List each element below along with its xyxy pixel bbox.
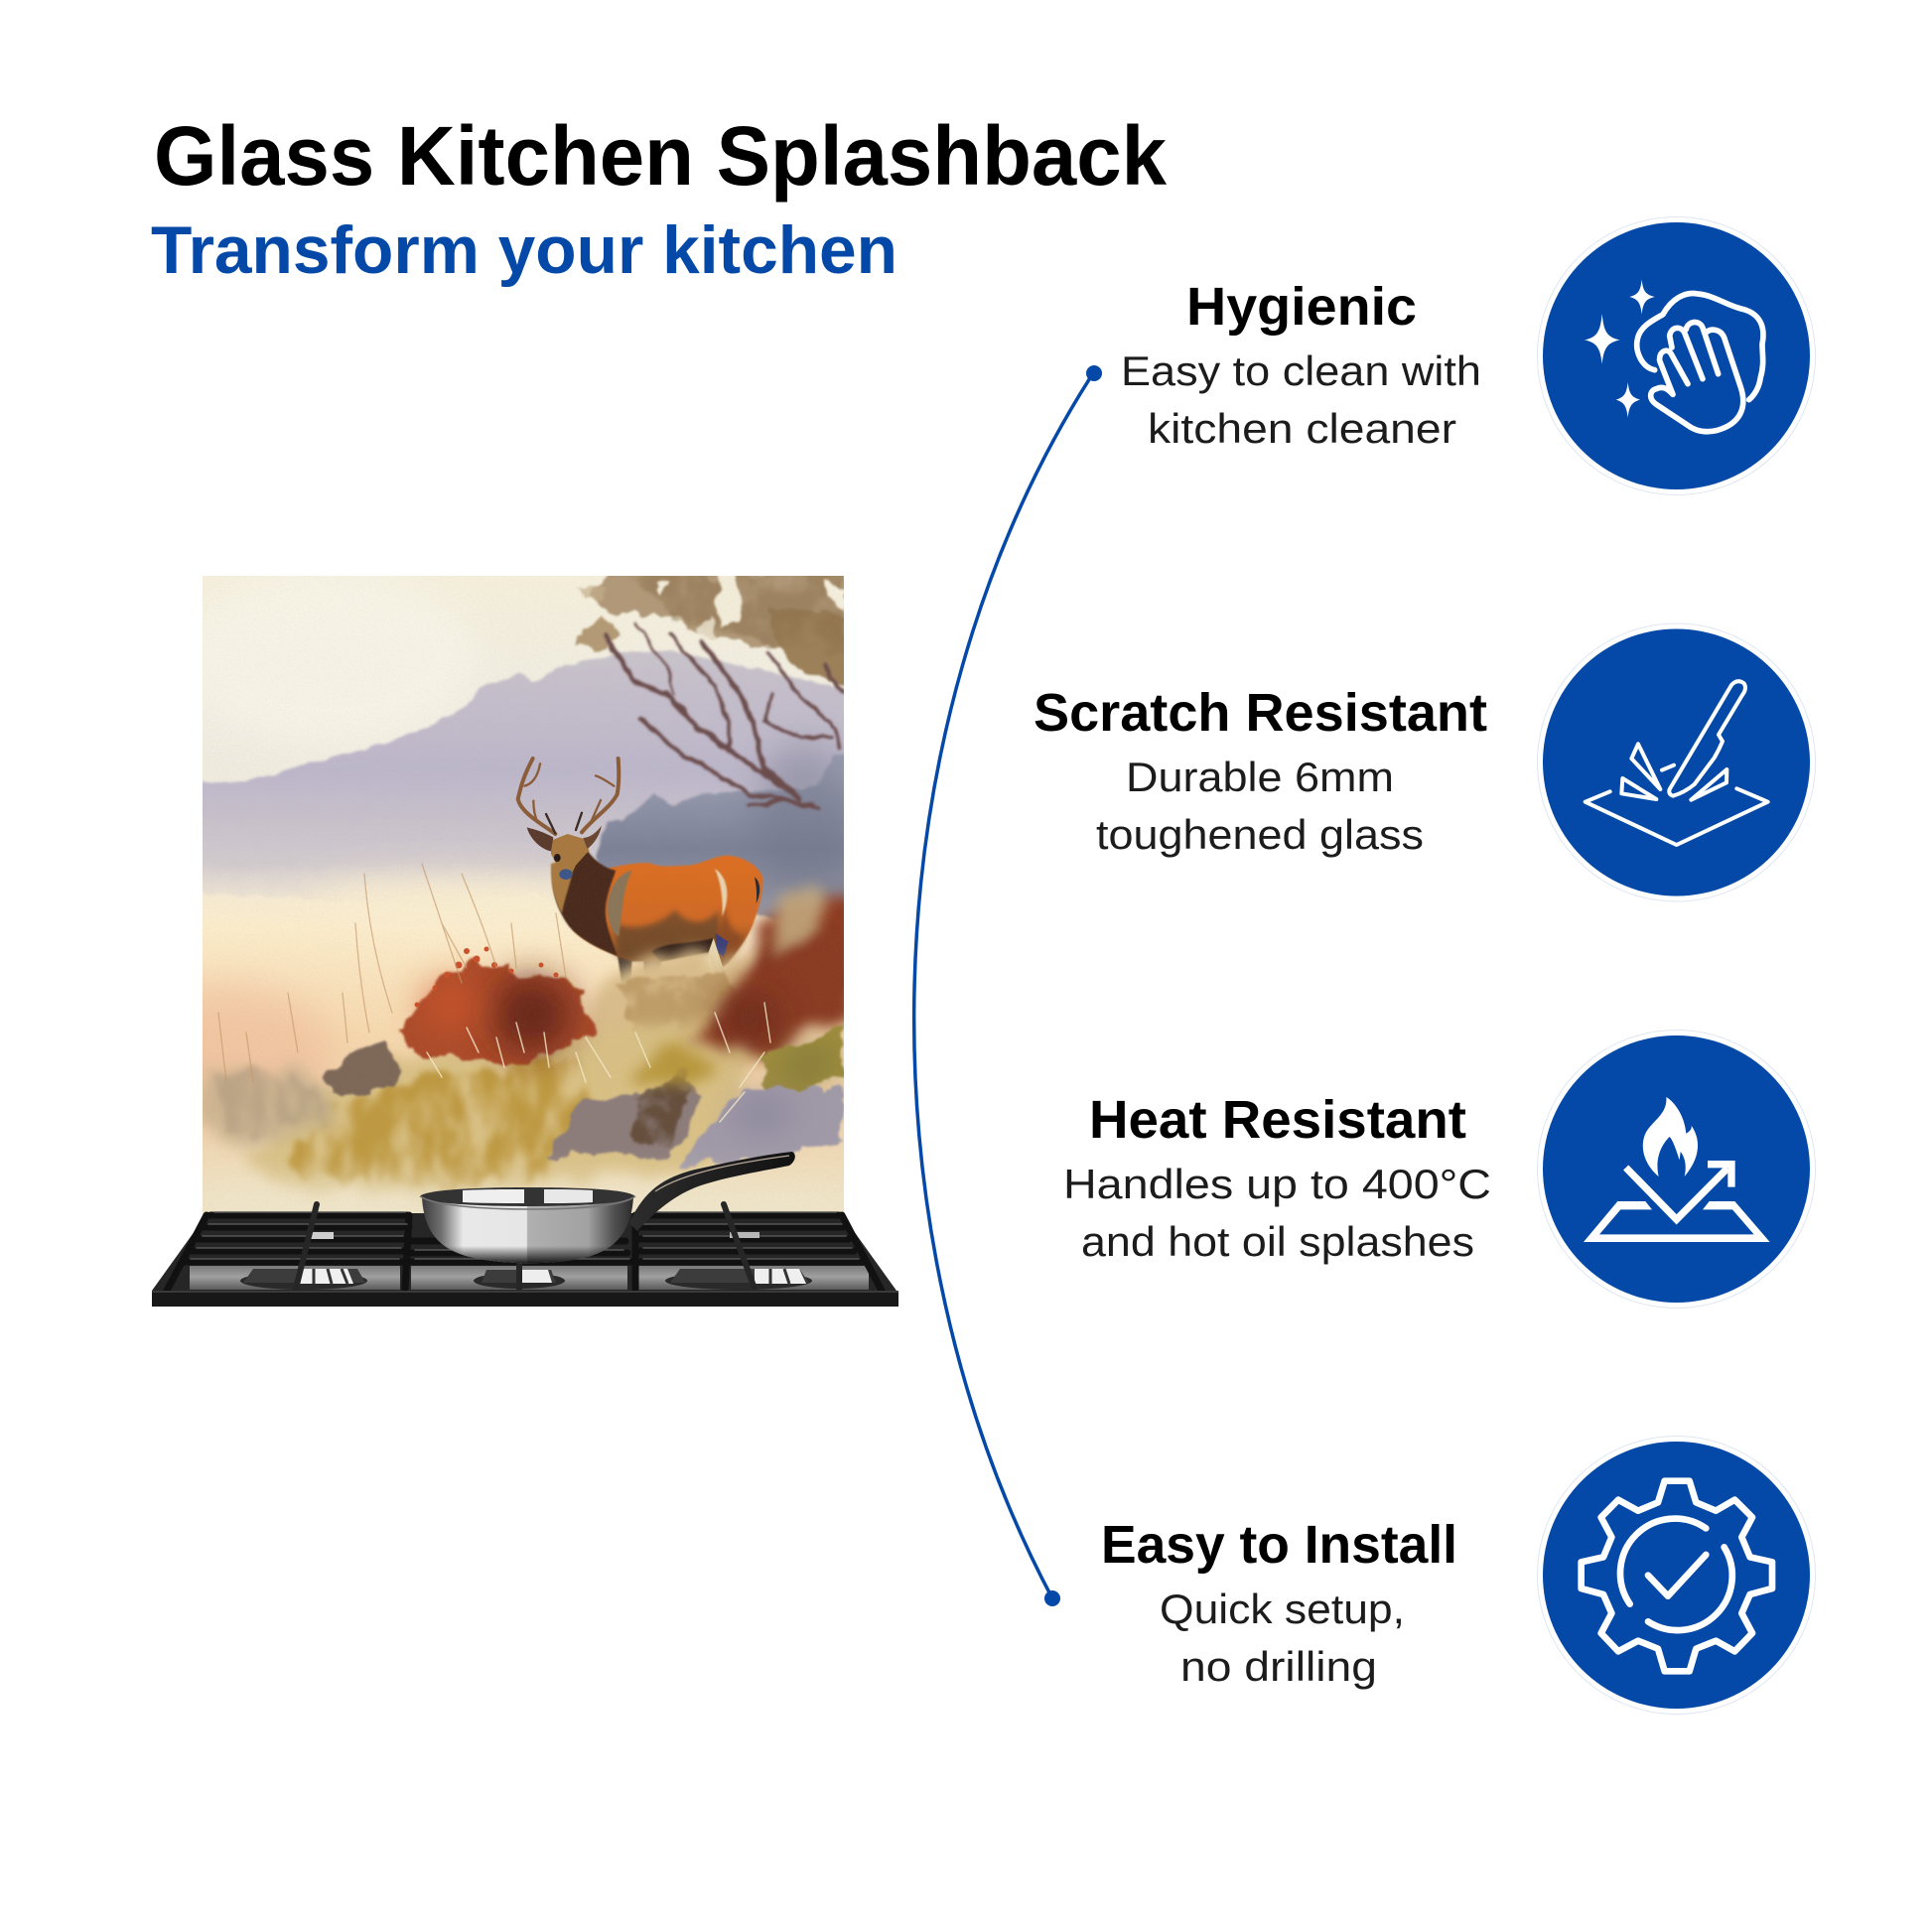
heather speckles (415, 947, 558, 1007)
canopy gaps (655, 574, 844, 640)
hillside behind stag (745, 885, 844, 990)
description: toughened glass (1096, 811, 1424, 858)
subtitle: Transform your kitchen (151, 212, 897, 288)
burners (240, 1232, 812, 1290)
antlers (518, 759, 619, 834)
hob surface (152, 1213, 897, 1307)
description: kitchen cleaner (1148, 405, 1456, 452)
grate bars (167, 1212, 882, 1291)
centre and side pan supports (296, 1204, 755, 1289)
front edge (152, 1291, 898, 1307)
icon: flame over surface (1537, 1031, 1815, 1309)
stag (518, 759, 762, 996)
steel burner trays (190, 1266, 869, 1290)
description (1063, 1161, 1491, 1265)
rump and body (573, 856, 762, 968)
watercolour stag painting (203, 576, 844, 1215)
distant tree line (596, 755, 854, 923)
heather on right slope (695, 918, 854, 1057)
description: Durable 6mm (1126, 754, 1394, 800)
description: Handles up to 400°C (1063, 1161, 1491, 1207)
feature: scratch resistant (1034, 623, 1815, 901)
pan body (422, 1197, 633, 1263)
foreground wash (203, 1186, 844, 1251)
olive slope (761, 1030, 843, 1092)
description (1160, 1586, 1405, 1690)
gas hob (152, 1204, 898, 1307)
description: Easy to clean with (1121, 347, 1481, 394)
tree canopy (576, 571, 854, 685)
legs (617, 955, 661, 983)
heading: Scratch Resistant (1034, 683, 1487, 743)
grass strokes and flecks (218, 864, 770, 1122)
golden grass (248, 1023, 764, 1196)
frying pan (420, 1152, 795, 1263)
description: no drilling (1180, 1643, 1377, 1690)
title: Glass Kitchen Splashback (154, 109, 1167, 203)
rocks (327, 1042, 402, 1095)
description: Quick setup, (1160, 1586, 1405, 1632)
pan rim (420, 1187, 635, 1206)
feature: heat resistant (1063, 1031, 1815, 1309)
description: and hot oil splashes (1081, 1218, 1474, 1265)
mountain (203, 649, 844, 897)
top dot (1086, 365, 1102, 381)
product illustration: splashback and hob (114, 566, 898, 1307)
heading: Hygienic (1186, 277, 1417, 337)
description (1096, 754, 1424, 858)
red heather bush (399, 961, 594, 1064)
neck and mane (552, 851, 618, 956)
heading: Heat Resistant (1089, 1090, 1466, 1150)
bare branches (605, 622, 844, 809)
description (1121, 347, 1481, 452)
icon: gear with check mark (1537, 1436, 1815, 1714)
icon: knife scratching glass (1537, 623, 1815, 901)
head (551, 834, 590, 873)
heading: Easy to Install (1101, 1515, 1457, 1575)
feature: hygienic (1121, 216, 1815, 494)
pan handle (629, 1152, 795, 1231)
icon: hand wiping with sparkles (1537, 216, 1815, 494)
dry grass beneath stag (587, 940, 759, 1039)
body shading (616, 910, 722, 960)
connector arc with end dots (914, 365, 1102, 1606)
bottom dot (1044, 1590, 1060, 1606)
feature: easy to install (1101, 1436, 1815, 1714)
